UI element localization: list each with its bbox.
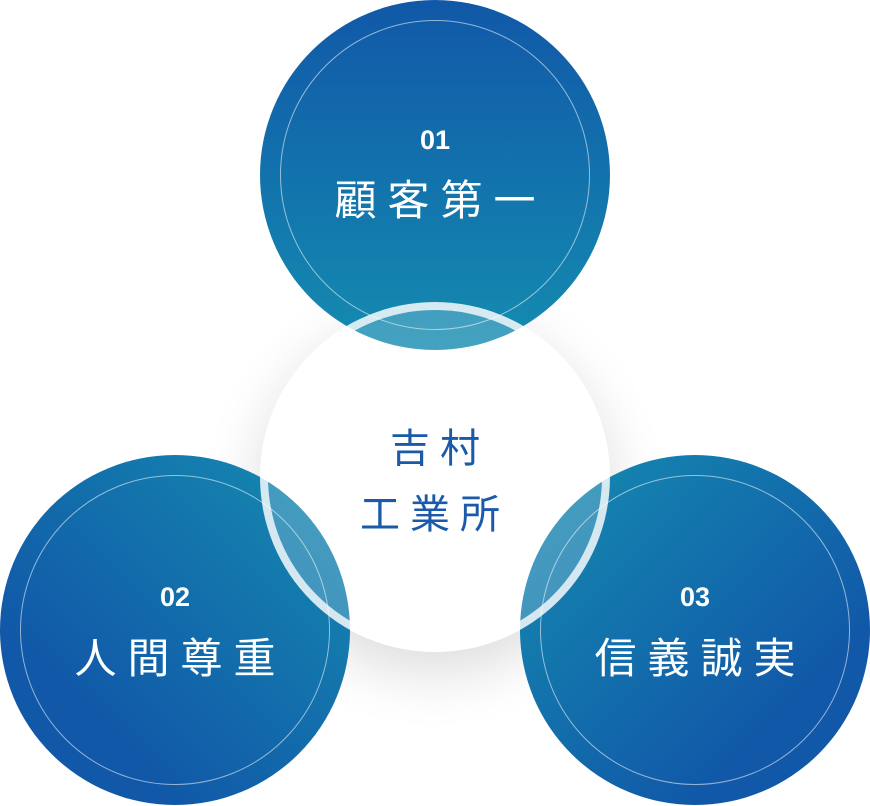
- label 人間尊重: 人間尊重: [74, 635, 286, 682]
- number 03: 03: [680, 582, 710, 612]
- number 01: 01: [420, 125, 450, 155]
- center shadow circle: [260, 302, 610, 652]
- center title: 工業所: [360, 493, 510, 537]
- label 信義誠実: 信義誠実: [594, 635, 806, 682]
- circle 03: [520, 455, 870, 805]
- circle 02: [0, 455, 350, 805]
- circle 01: [260, 0, 610, 350]
- center overlay circle: [260, 302, 610, 652]
- center title: 吉村: [390, 427, 490, 471]
- number 02: 02: [160, 582, 190, 612]
- center title: [360, 427, 510, 537]
- label 顧客第一: 顧客第一: [334, 177, 546, 224]
